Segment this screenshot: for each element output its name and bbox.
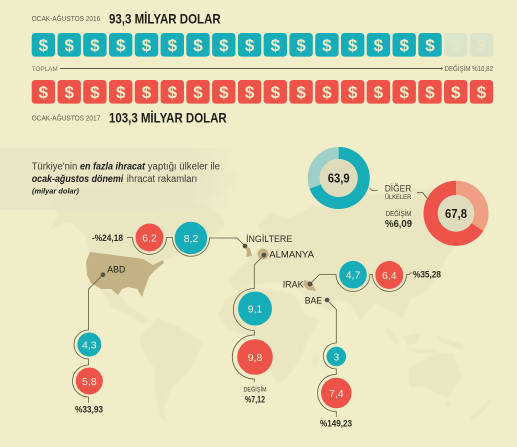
Almanya: DEĞİŞİM: [244, 384, 266, 393]
dollar row 2016: $: [296, 36, 306, 55]
donut: other countries 2017: 67,8: [445, 207, 467, 221]
dollar row 2017: $: [374, 83, 384, 102]
title text: ihracat rakamları: [127, 174, 197, 185]
BAE: %149,23: [320, 418, 352, 428]
title band: [0, 148, 240, 210]
dollar row 2017: $: [142, 83, 152, 102]
dollar row 2016: $: [168, 36, 178, 55]
total change line: TOPLAM: [32, 66, 58, 73]
Almanya: %7,12: [245, 394, 265, 404]
Irak: %35,28: [413, 270, 441, 280]
BAE: 7,4: [329, 388, 344, 400]
dollar row 2017: $: [116, 83, 126, 102]
ABD: ABD: [107, 264, 125, 275]
dollar row 2016: $: [425, 36, 435, 55]
dollar row 2016: $: [193, 36, 203, 55]
dollar row 2017: $: [271, 83, 281, 102]
Irak: [283, 261, 441, 292]
world map: [50, 168, 491, 423]
total change line: [32, 64, 493, 73]
dollar row 2016: $: [399, 36, 409, 55]
dollar row 2016: $: [64, 36, 74, 55]
other countries label: %6,09: [385, 219, 412, 230]
İngiltere connector and bubbles: 8,2: [184, 233, 198, 245]
dollar row 2016: $: [451, 36, 461, 55]
dollar row 2017: $: [90, 83, 100, 102]
title text: Türkiye'nin: [32, 162, 77, 172]
dollar row 2017: $: [425, 83, 435, 102]
dollar row 2017: $: [245, 83, 255, 102]
donut: other countries 2016: [310, 147, 370, 209]
ABD: %33,93: [75, 404, 103, 414]
dollar row 2017: $: [322, 83, 332, 102]
Irak: IRAK: [283, 280, 304, 290]
Almanya: ALMANYA: [269, 250, 315, 260]
dollar row 2016: $: [245, 36, 255, 55]
dollar row 2017: $: [219, 83, 229, 102]
ABD: 5,8: [82, 376, 97, 388]
Irak: 6,4: [382, 270, 397, 282]
dollar row 2017: $: [39, 83, 49, 102]
dollar row 2016: $: [374, 36, 384, 55]
dollar row 2017: $: [399, 83, 409, 102]
dollar row 2017: [32, 80, 493, 104]
ABD: [72, 264, 125, 414]
heading: 2017: 103,3 MİLYAR DOLAR: [109, 110, 227, 126]
BAE: [305, 295, 352, 428]
İngiltere connector and bubbles: -%24,18: [92, 233, 123, 243]
BAE: 3: [333, 351, 339, 363]
Almanya: 9,8: [248, 352, 262, 364]
map highlights: ABD, İngiltere, Almanya, Irak: [86, 247, 316, 297]
heading: 2017: OCAK-AĞUSTOS 2017: [32, 114, 100, 123]
title text: (milyar dolar): [32, 188, 80, 196]
dollar row 2016: [32, 33, 493, 57]
dollar row 2017: $: [348, 83, 358, 102]
title text: yaptığı ülkeler ile: [148, 162, 220, 172]
title text: [32, 162, 220, 196]
dollar row 2017: $: [193, 83, 203, 102]
Irak: 4,7: [346, 270, 360, 282]
donut: other countries 2017: [424, 181, 483, 246]
dollar row 2016: $: [142, 36, 152, 55]
dollar row 2016: $: [348, 36, 358, 55]
dollar row 2017: $: [477, 83, 487, 102]
Almanya: [232, 250, 315, 404]
dollar row 2016: $: [116, 36, 126, 55]
İngiltere connector and bubbles: [92, 222, 292, 256]
İngiltere connector and bubbles: 6,2: [142, 232, 157, 244]
total change line: DEĞİŞİM %10,82: [444, 64, 493, 73]
dollar row 2016: $: [271, 36, 281, 55]
dollar row 2017: $: [296, 83, 306, 102]
Almanya: 9,1: [248, 303, 262, 315]
dollar row 2016: $: [39, 36, 49, 55]
title text: en fazla ihracat: [80, 162, 146, 172]
dollar row 2017: $: [451, 83, 461, 102]
heading: 2016: 93,3 MİLYAR DOLAR: [109, 10, 221, 26]
dollar row 2016: $: [322, 36, 332, 55]
other countries label: ÜLKELER: [385, 193, 412, 201]
İngiltere connector and bubbles: İNGİLTERE: [246, 234, 292, 245]
ABD: 4,3: [82, 339, 97, 351]
dollar row 2017: $: [168, 83, 178, 102]
heading: 2016: OCAK-AĞUSTOS 2016: [32, 14, 100, 23]
BAE: BAE: [305, 295, 322, 306]
other countries label: DEĞİŞİM: [386, 209, 411, 218]
title text: ocak-ağustos dönemi: [32, 174, 123, 185]
other countries label: [370, 184, 427, 230]
dollar row 2016: $: [477, 36, 487, 55]
dollar row 2016: $: [219, 36, 229, 55]
heading: 2016: [32, 10, 221, 26]
dollar row 2017: $: [64, 83, 74, 102]
heading: 2017: [32, 110, 227, 126]
other countries label: DİĞER: [385, 184, 411, 194]
dollar row 2016: $: [90, 36, 100, 55]
donut: other countries 2016: 63,9: [328, 172, 350, 186]
